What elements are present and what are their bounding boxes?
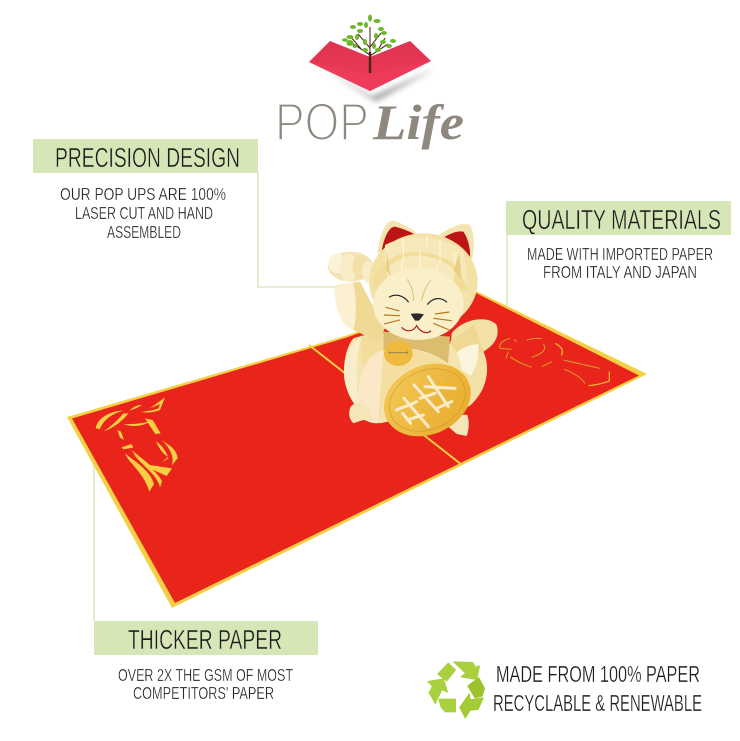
ornament: left figure xyxy=(96,397,178,492)
cat: head xyxy=(369,233,478,330)
cat: bell xyxy=(384,341,413,366)
pop-up card xyxy=(67,291,647,608)
heading bar: precision design xyxy=(33,139,258,173)
text: recyclable note xyxy=(493,661,702,716)
text: precision design description xyxy=(60,184,226,242)
card base xyxy=(67,291,647,608)
cat: raised paw xyxy=(328,252,373,282)
logo: wordmark Life: Life xyxy=(372,94,464,150)
cat: tail and right back xyxy=(447,319,498,410)
panel: quality materials xyxy=(506,201,731,282)
cat: face xyxy=(373,268,464,340)
leader lines xyxy=(94,173,507,621)
cat: gold coin xyxy=(372,350,482,450)
panel: precision design xyxy=(33,139,258,242)
heading: thicker paper: THICKER PAPER xyxy=(128,624,282,655)
panel: thicker paper xyxy=(94,621,318,703)
text: precision design description: ASSEMBLED xyxy=(107,222,181,242)
cat: raised arm xyxy=(335,282,387,342)
logo: tree xyxy=(342,14,396,73)
cat: back feet xyxy=(349,403,469,436)
ornament: right figure xyxy=(500,338,609,386)
text: quality materials description: FROM ITALY AND JAPAN xyxy=(543,262,697,282)
icon: recycling arrows xyxy=(428,662,484,718)
logo: wordmark POP: POP xyxy=(275,93,369,152)
text: thicker paper description: COMPETITORS' PAPER xyxy=(133,683,274,703)
heading bar: thicker paper xyxy=(94,621,318,655)
heading: precision design: PRECISION DESIGN xyxy=(55,142,240,173)
card: red surface xyxy=(72,293,639,603)
logo xyxy=(275,14,464,152)
text: thicker paper description: OVER 2X THE GSM OF MOST xyxy=(118,665,293,685)
icon: maneki-neko cat xyxy=(328,221,498,450)
text: precision design description: OUR POP UPS ARE 100% xyxy=(60,184,226,204)
text: precision design description: LASER CUT AND HAND xyxy=(75,203,213,223)
text: quality materials description xyxy=(527,244,713,282)
cat: body xyxy=(344,332,462,423)
text: thicker paper description xyxy=(118,665,293,703)
cat: ears xyxy=(377,221,474,263)
card: centre fold xyxy=(309,345,462,465)
logo: pop-up book xyxy=(309,41,436,102)
heading bar: quality materials xyxy=(506,201,731,235)
